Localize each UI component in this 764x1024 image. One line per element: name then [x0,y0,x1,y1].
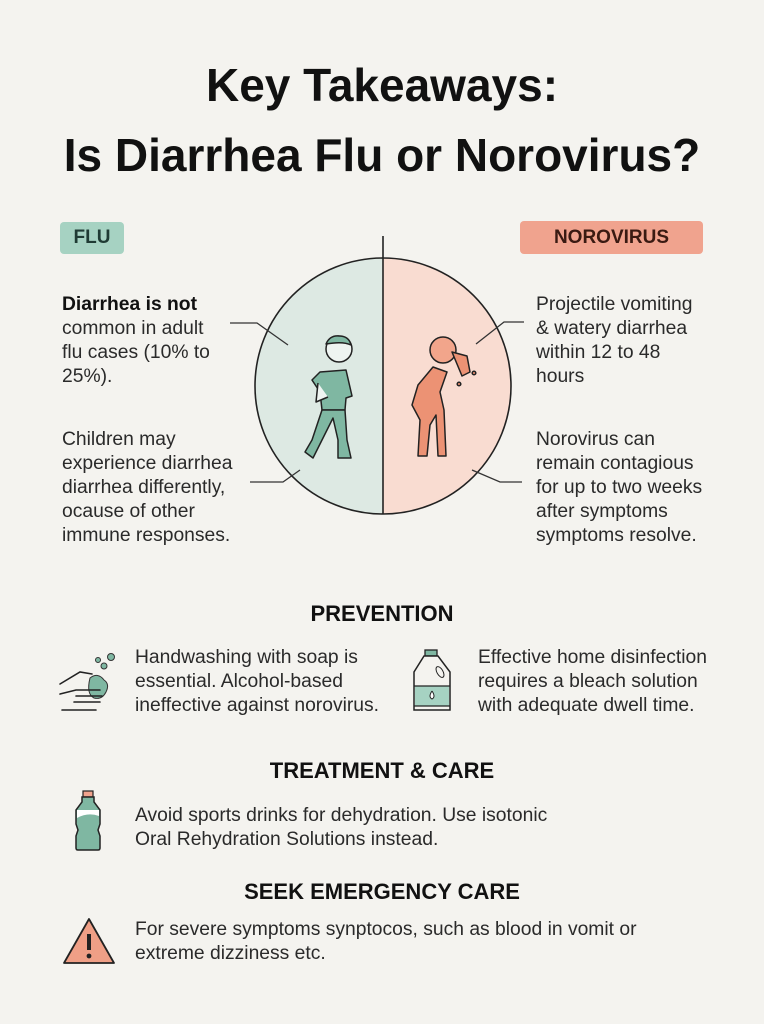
text: treatment: Oral Rehydration Solutions instead. [135,829,438,850]
text: flu point 1: flu cases (10% to [62,342,210,363]
title [64,59,700,181]
text: norovirus point 1 [536,294,692,387]
text: flu point 1 [62,294,210,387]
text: norovirus point 2: for up to two weeks [536,477,702,498]
text: flu point 2: Children may [62,429,176,450]
text: norovirus point 2: after symptoms [536,501,668,522]
icon: handwashing [59,653,115,711]
text: norovirus point 2: Norovirus can [536,429,655,450]
text: norovirus point 1: hours [536,366,584,387]
badge: flu: FLU [74,227,110,248]
text: disinfection: with adequate dwell time. [478,695,694,716]
text: treatment [135,805,547,850]
heading: treatment: TREATMENT & CARE [270,758,494,783]
text: norovirus point 1: & watery diarrhea [536,318,687,339]
text: disinfection [478,647,707,716]
icon: warning triangle [63,918,115,964]
text: handwashing: Handwashing with soap is [135,647,358,668]
text: flu point 1: Diarrhea is not [62,294,197,315]
text: treatment: Avoid sports drinks for dehydration. Use isotonic [135,805,547,826]
text: norovirus point 2: symptoms resolve. [536,525,697,546]
text: flu point 1: 25%). [62,366,112,387]
text: handwashing [135,647,379,716]
text: emergency: For severe symptoms synptocos, such as blood in vomit or [135,919,637,940]
text: flu point 2: experience diarrhea [62,453,232,474]
comparison circle diagram [230,236,524,515]
badge: norovirus [520,221,703,254]
text: norovirus point 2: remain contagious [536,453,694,474]
icon: norovirus person vomiting [412,337,476,456]
text: flu point 2: diarrhea differently, [62,477,225,498]
title: Key Takeaways: [206,59,558,111]
text: flu point 2: ocause of other [62,501,195,522]
text: norovirus point 2 [536,429,702,546]
text: handwashing: ineffective against norovirus. [135,695,379,716]
badge: norovirus: NOROVIRUS [554,227,669,248]
text: disinfection: requires a bleach solution [478,671,698,692]
text: flu point 1: common in adult [62,318,203,339]
text: flu point 2 [62,429,232,546]
text: disinfection: Effective home disinfection [478,647,707,668]
icon: water bottle [75,790,101,851]
text: emergency [135,919,637,964]
icon: bleach jug [413,649,451,711]
text: handwashing: essential. Alcohol-based [135,671,343,692]
heading: prevention: PREVENTION [310,601,454,626]
badge: flu [60,222,124,254]
text: flu point 2: immune responses. [62,525,230,546]
icon: flu person [305,336,352,458]
heading: emergency: SEEK EMERGENCY CARE [244,879,520,904]
text: norovirus point 1: Projectile vomiting [536,294,692,315]
title: Is Diarrhea Flu or Norovirus? [64,129,700,181]
text: emergency: extreme dizziness etc. [135,943,326,964]
text: norovirus point 1: within 12 to 48 [536,342,660,363]
